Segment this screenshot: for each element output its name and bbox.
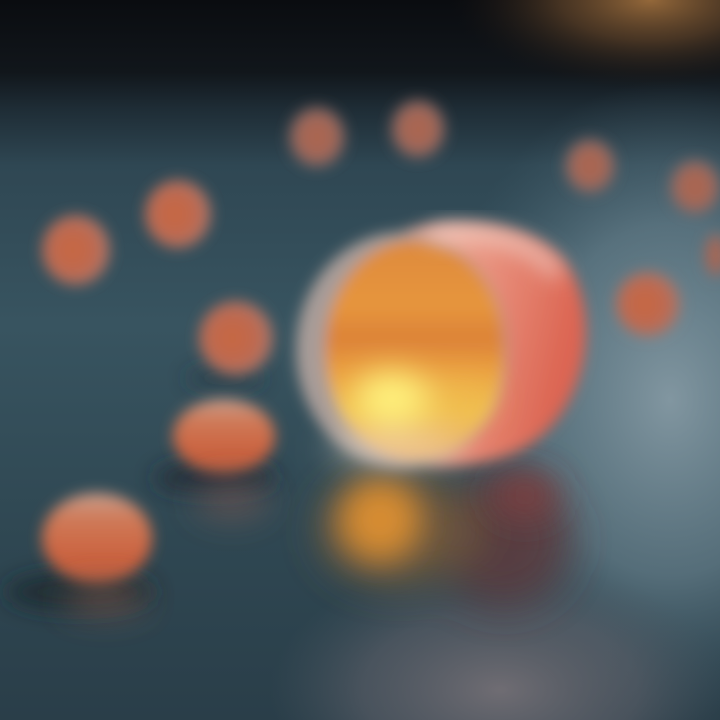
pill shadows	[5, 369, 277, 612]
central capsule	[296, 223, 586, 468]
capsule rim	[296, 232, 508, 468]
capsule shell	[399, 212, 596, 476]
capsule top highlight	[430, 232, 558, 275]
capsule inner glow	[325, 372, 494, 458]
right pill	[616, 272, 680, 336]
back row pills	[288, 99, 720, 278]
pill reflections	[63, 480, 270, 615]
foreground pills	[42, 301, 275, 583]
capsule interior	[325, 240, 505, 460]
central capsule reflection	[320, 471, 571, 606]
left pills	[42, 180, 211, 285]
